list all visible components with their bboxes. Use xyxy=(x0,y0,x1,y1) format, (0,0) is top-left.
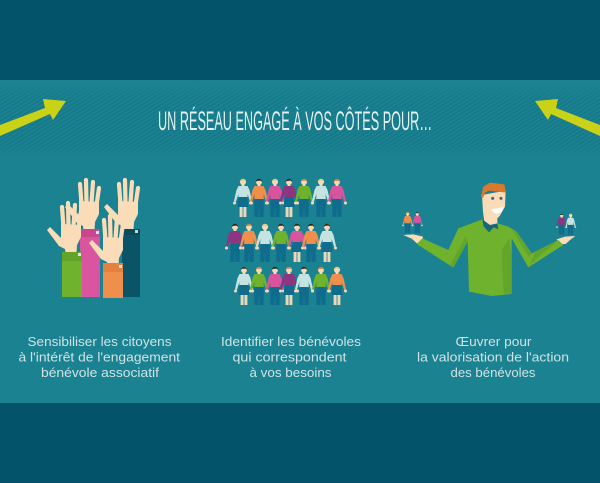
text block: column 1: bénévole associatif xyxy=(41,366,160,380)
text block: column 2: à vos besoins xyxy=(250,366,332,380)
hand: green sleeve xyxy=(47,203,82,297)
man: collar xyxy=(482,219,498,232)
infographic canvas xyxy=(0,80,600,403)
mini volunteers: left palm xyxy=(402,212,423,233)
text block: column 3: la valorisation de l'action xyxy=(417,350,569,364)
central teal panel xyxy=(0,80,600,403)
hand: pink sleeve xyxy=(65,180,100,297)
icon: rows of volunteers xyxy=(225,179,347,305)
man: shirt shading xyxy=(450,230,558,294)
text block: column 1: Sensibiliser les citoyens xyxy=(28,335,172,349)
mini volunteers: right palm xyxy=(556,214,576,235)
man: right hand xyxy=(557,236,575,244)
text block: column 1: à l'intérêt de l'engagement xyxy=(18,350,181,364)
text block: column 2 xyxy=(221,335,361,380)
volunteers row 1 xyxy=(233,179,347,217)
hand: dark sleeve xyxy=(104,180,140,297)
hand: orange sleeve xyxy=(89,216,123,298)
man: left hand xyxy=(403,234,423,243)
text block: column 3 xyxy=(417,335,569,380)
icon: man holding volunteers xyxy=(402,183,576,296)
man: green shirt xyxy=(417,219,563,296)
man: hair xyxy=(481,183,506,198)
man: smile xyxy=(491,207,504,214)
arrow: right xyxy=(535,99,600,136)
top dark band xyxy=(0,0,600,80)
text block: column 2: Identifier les bénévoles xyxy=(221,335,361,349)
icon: raised hands xyxy=(47,180,140,298)
text block: column 3: des bénévoles xyxy=(450,366,536,380)
text block: column 1 xyxy=(18,335,181,380)
volunteers row 2 xyxy=(225,224,337,262)
arrow: left xyxy=(0,99,66,136)
text block: column 2: qui correspondent xyxy=(232,350,347,364)
bottom dark band xyxy=(0,403,600,483)
volunteers row 3 xyxy=(234,267,347,305)
man: neck and face xyxy=(482,191,506,230)
man: eyes xyxy=(491,197,502,200)
text block: column 3: Œuvrer pour xyxy=(456,335,532,349)
